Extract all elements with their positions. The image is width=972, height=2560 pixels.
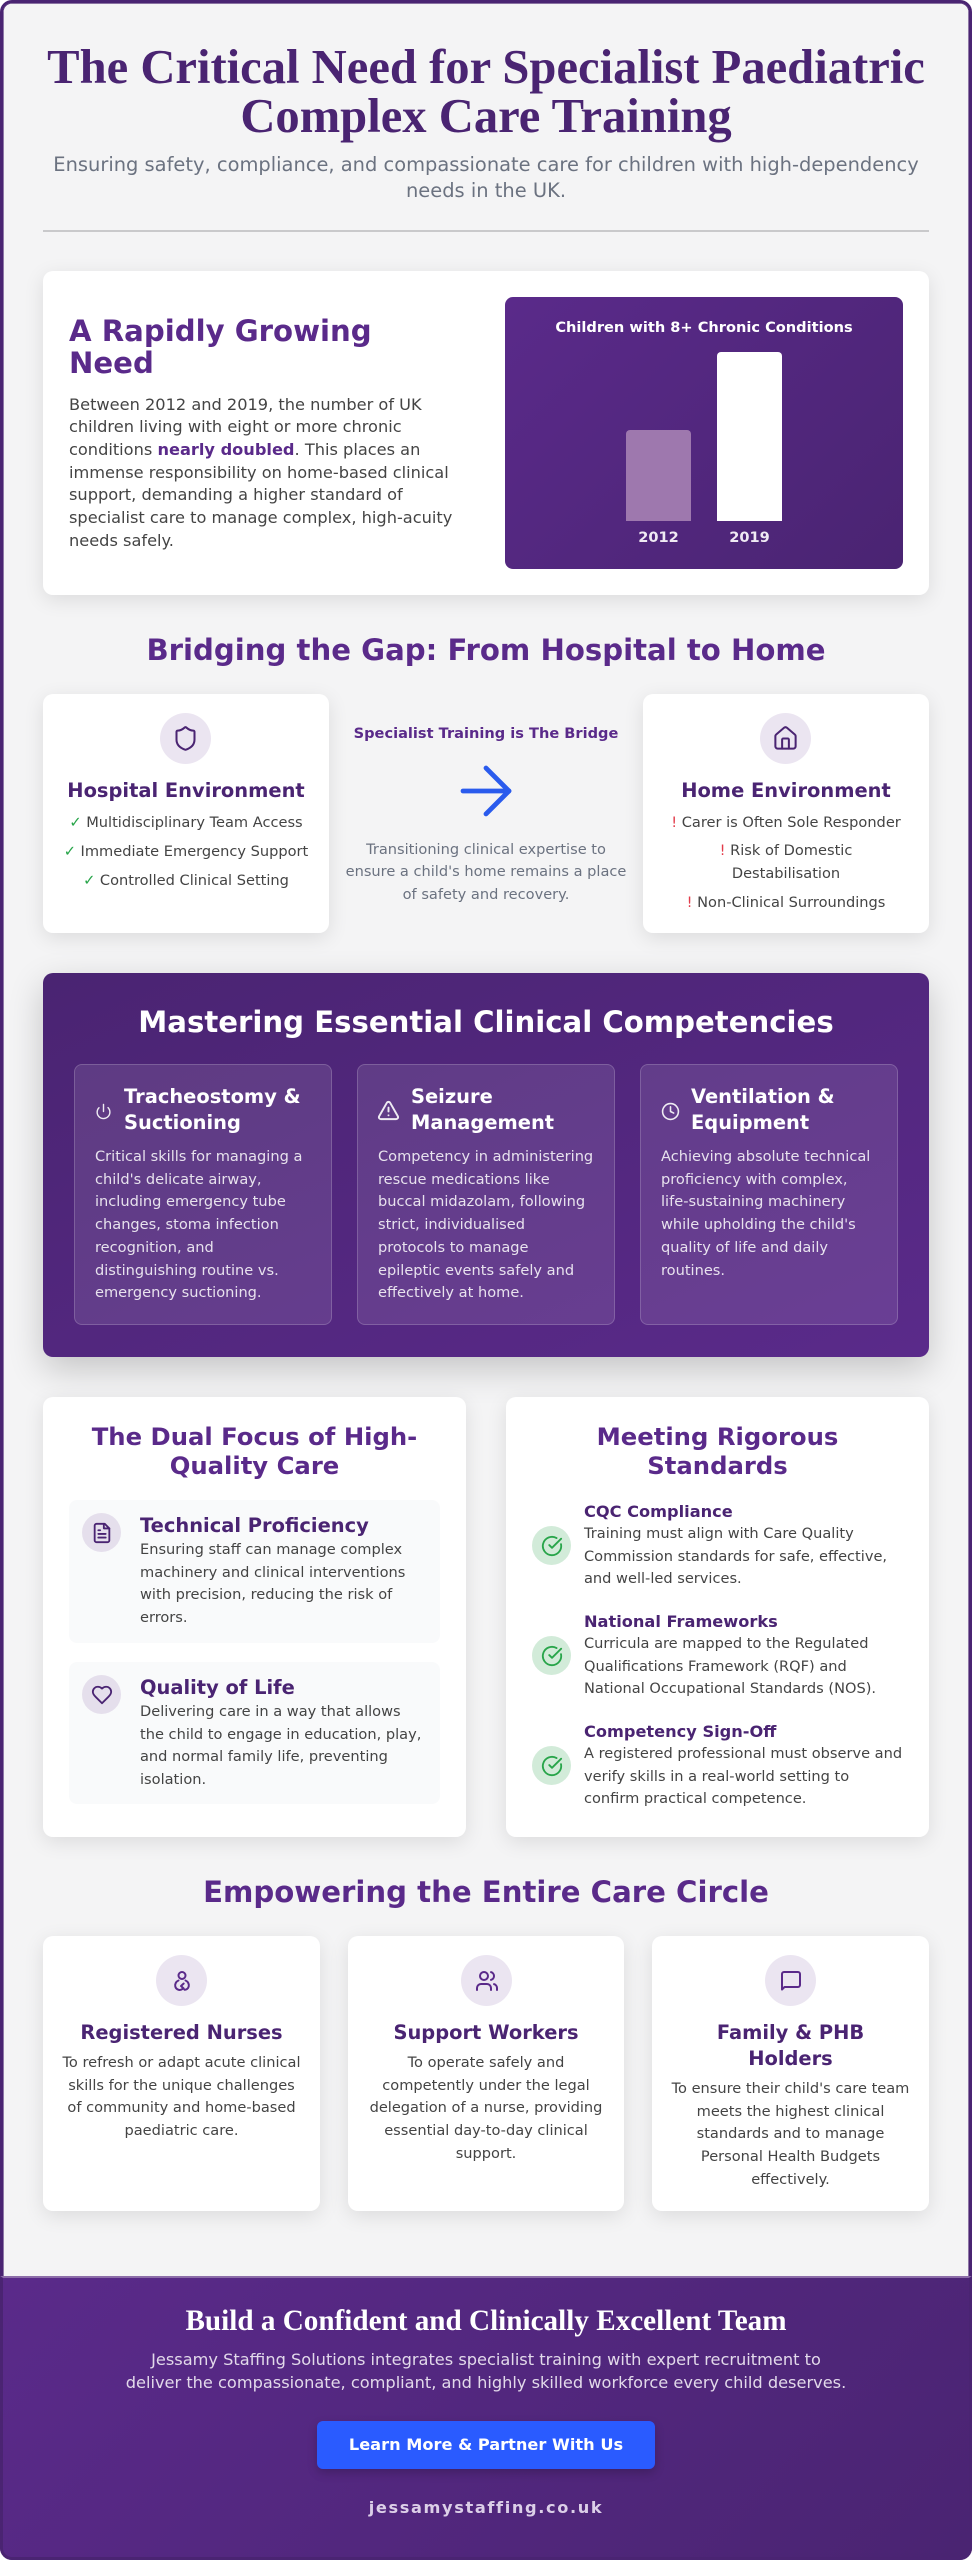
bridge label: Specialist Training is The Bridge (354, 725, 618, 742)
card text: paediatric care. (124, 2122, 239, 2139)
card text: emergency suctioning. (95, 1284, 262, 1301)
card text: To operate safely and (408, 2054, 564, 2071)
icon: check 1 (532, 1526, 571, 1565)
heading: care circle: Empowering the Entire Care Circle (203, 1875, 769, 1909)
arrow (460, 766, 512, 816)
text: rapidly growing need: support, demanding a higher standard of (69, 485, 403, 504)
icon: heart (82, 1675, 121, 1714)
sub-panel text: errors. (140, 1609, 188, 1626)
card: tracheostomy (74, 1064, 332, 1325)
subtitle: Ensuring safety, compliance, and compassionate care for children with high-dependency (53, 153, 919, 176)
title (47, 40, 925, 143)
card text: protocols to manage (378, 1239, 528, 1256)
icon: clock (662, 1102, 680, 1120)
icon: users (461, 1955, 512, 2006)
card title: Equipment (691, 1111, 809, 1134)
card: ventilation and equipment (640, 1064, 898, 1325)
panel: hospital environment (43, 694, 329, 933)
card title: Management (411, 1111, 554, 1134)
card text: Personal Health Budgets (701, 2148, 880, 2165)
card title: Ventilation & (691, 1085, 835, 1108)
card text: skills for the unique challenges (68, 2077, 295, 2094)
text: rapidly growing need: specialist care to manage complex, high-acuity (69, 508, 452, 527)
heading: rapidly growing need (69, 314, 372, 380)
card: seizure management (357, 1064, 615, 1325)
heading: dual focus: The Dual Focus of High- (92, 1422, 417, 1451)
title: The Critical Need for Specialist Paediatric (47, 40, 925, 94)
card text: buccal midazolam, following (378, 1193, 585, 1210)
card text (370, 2054, 602, 2162)
text: Commission standards for safe, effective, (584, 1548, 887, 1565)
icon: document (82, 1513, 121, 1552)
text (584, 1635, 876, 1697)
heading: bridging the gap: Bridging the Gap: From Hospital to Home (146, 633, 826, 667)
card text: Critical skills for managing a (95, 1148, 302, 1165)
footer title: Build a Confident and Clinically Excellent Team (185, 2305, 787, 2337)
card text (661, 1148, 870, 1279)
sub-panel title: Technical Proficiency (140, 1514, 369, 1537)
bridge text: Transitioning clinical expertise to (366, 840, 606, 858)
footer band (0, 2276, 972, 2560)
heading: dual focus: Quality Care (170, 1451, 339, 1480)
title: Competency Sign-Off (584, 1722, 776, 1741)
subtitle (53, 153, 919, 202)
bridge text: of safety and recovery. (403, 886, 569, 903)
sub-panel text: machinery and clinical interventions (140, 1564, 405, 1581)
heading: rapidly growing need: A Rapidly Growing (69, 314, 372, 348)
panel: clinical competencies (43, 973, 929, 1357)
card title (691, 1085, 835, 1134)
card text: Achieving absolute technical (661, 1148, 870, 1165)
card text: standards and to manage (697, 2125, 884, 2142)
icon: power (96, 1104, 111, 1120)
sub-panel: quality of life (69, 1662, 440, 1804)
heading: Hospital Environment (67, 779, 305, 802)
bridge text: ensure a child's home remains a place (346, 863, 626, 880)
icon: check 2 (532, 1636, 571, 1675)
bar: 2019 (717, 352, 782, 521)
card title: Holders (748, 2047, 833, 2070)
heading: rapidly growing need: Need (69, 346, 154, 380)
card text (378, 1148, 593, 1301)
text: A registered professional must observe and (584, 1745, 902, 1762)
heading: rigorous standards: Meeting Rigorous (597, 1422, 838, 1451)
card text: changes, stoma infection (95, 1216, 279, 1233)
text: National Occupational Standards (NOS). (584, 1680, 876, 1697)
panel: bridge (346, 725, 626, 903)
standard: national frameworks (584, 1612, 876, 1697)
card text: routines. (661, 1262, 725, 1279)
text: rapidly growing need: children living with eight or more chronic (69, 417, 402, 436)
panel: rapidly growing need (43, 271, 929, 595)
card title: Suctioning (124, 1111, 241, 1134)
icon: warning triangle (378, 1100, 400, 1120)
card text: child's delicate airway, (95, 1171, 262, 1188)
checklist: ✓ Controlled Clinical Setting (83, 872, 289, 888)
footer text (126, 2350, 846, 2392)
card title: Support Workers (393, 2020, 579, 2044)
bar: 2012 (626, 430, 691, 521)
heading: dual focus (92, 1422, 417, 1480)
card text: delegation of a nurse, providing (370, 2099, 602, 2116)
text (584, 1525, 887, 1587)
checklist (64, 814, 308, 888)
sub-panel text (140, 1541, 405, 1626)
checklist: ✓ Multidisciplinary Team Access (69, 814, 303, 830)
card text: including emergency tube (95, 1193, 286, 1210)
text: rapidly growing need: Between 2012 and 2019, the number of UK (69, 394, 422, 414)
text: rapidly growing need: needs safely. (69, 531, 174, 550)
card text (62, 2054, 301, 2139)
card title: Seizure (411, 1085, 493, 1108)
risk list (671, 814, 901, 911)
card text: To refresh or adapt acute clinical (62, 2054, 301, 2071)
text: and well-led services. (584, 1570, 742, 1587)
divider (43, 230, 929, 232)
text: confirm practical competence. (584, 1790, 806, 1807)
card text: of community and home-based (67, 2099, 296, 2116)
card text: essential day-to-day clinical (384, 2122, 588, 2139)
heading: clinical competencies: Mastering Essential Clinical Competencies (138, 1005, 834, 1039)
call to action button (317, 2421, 655, 2469)
sub-panel text: Ensuring staff can manage complex (140, 1541, 402, 1558)
card text: while upholding the child's (661, 1216, 856, 1233)
card text: distinguishing routine vs. (95, 1262, 279, 1279)
card text: support. (456, 2145, 516, 2162)
card text: quality of life and daily (661, 1239, 828, 1256)
bridge text (346, 840, 626, 903)
footer text: Jessamy Staffing Solutions integrates specialist training with expert recruitment to (151, 2350, 821, 2369)
panel: dual focus (43, 1397, 466, 1837)
bar label: 2019: 2019 (729, 529, 770, 546)
sub-panel text (140, 1703, 421, 1788)
card text: effectively. (751, 2171, 830, 2188)
card title: Family & PHB (717, 2020, 864, 2044)
heading: rigorous standards: Standards (647, 1451, 788, 1480)
card text (672, 2080, 909, 2188)
standard: competency sign-off (584, 1722, 902, 1807)
title: National Frameworks (584, 1612, 778, 1631)
subtitle: needs in the UK. (406, 179, 566, 202)
sub-panel text: and normal family life, preventing (140, 1748, 388, 1765)
standard: CQC compliance (584, 1502, 887, 1587)
icon: home (760, 713, 811, 764)
text: rapidly growing need (69, 394, 452, 550)
card text: rescue medications like (378, 1171, 550, 1188)
card: registered nurses (43, 1936, 320, 2211)
card text: recognition, and (95, 1239, 214, 1256)
text: Training must align with Care Quality (584, 1525, 854, 1542)
text: Qualifications Framework (RQF) and (584, 1658, 847, 1675)
text: verify skills in a real-world setting to (584, 1768, 849, 1785)
sub-panel text: isolation. (140, 1771, 206, 1788)
text: Curricula are mapped to the Regulated (584, 1635, 868, 1652)
card: family and PHB holders (652, 1936, 929, 2211)
card title (717, 2020, 864, 2070)
sub-panel text: Delivering care in a way that allows (140, 1703, 401, 1720)
text: rapidly growing need: immense responsibility on home-based clinical (69, 463, 449, 482)
card text: epileptic events safely and (378, 1262, 574, 1279)
risk list: Destabilisation (732, 865, 840, 882)
bar label: 2012: 2012 (638, 529, 679, 546)
chart title: Children with 8+ Chronic Conditions (555, 318, 853, 336)
checklist: ✓ Immediate Emergency Support (64, 842, 308, 860)
sub-panel text: with precision, reducing the risk of (140, 1586, 392, 1603)
card text: effectively at home. (378, 1284, 524, 1301)
panel: rigorous standards (506, 1397, 929, 1837)
card title: Registered Nurses (80, 2020, 283, 2044)
text (584, 1745, 902, 1807)
heading: Home Environment (681, 779, 891, 802)
risk list: ! Carer is Often Sole Responder (671, 814, 901, 831)
risk list: ! Non-Clinical Surroundings (687, 894, 885, 911)
title: CQC Compliance (584, 1502, 733, 1521)
icon: message square (765, 1955, 816, 2006)
card text: meets the highest clinical (697, 2103, 884, 2120)
card title: Tracheostomy & (124, 1085, 301, 1108)
icon: shield (160, 713, 211, 764)
card: support workers (348, 1936, 624, 2211)
website: jessamystaffing.co.uk (369, 2498, 603, 2517)
card text (95, 1148, 302, 1301)
title: Complex Care Training (240, 89, 732, 143)
card text: Competency in administering (378, 1148, 593, 1165)
card text: proficiency with complex, (661, 1171, 848, 1188)
card text: To ensure their child's care team (672, 2080, 909, 2097)
risk list: ! Risk of Domestic (720, 842, 852, 859)
heading: rigorous standards (597, 1422, 838, 1480)
sub-panel: technical proficiency (69, 1500, 440, 1643)
bar chart: children with 8+ chronic conditions (505, 297, 903, 569)
card text: life-sustaining machinery (661, 1193, 845, 1210)
sub-panel title: Quality of Life (140, 1676, 295, 1699)
call to action button: Learn More & Partner With Us (349, 2435, 623, 2454)
card text: strict, individualised (378, 1216, 525, 1233)
footer text: deliver the compassionate, compliant, and highly skilled workforce every child deserves. (126, 2373, 846, 2392)
icon: nurse (156, 1955, 207, 2006)
card text: competently under the legal (382, 2077, 590, 2094)
text: rapidly growing need: conditions nearly doubled. This places an (69, 440, 420, 459)
sub-panel text: the child to engage in education, play, (140, 1726, 421, 1743)
card title (411, 1085, 554, 1134)
icon: check 3 (532, 1746, 571, 1785)
card title (124, 1085, 301, 1134)
panel: home environment (643, 694, 929, 933)
